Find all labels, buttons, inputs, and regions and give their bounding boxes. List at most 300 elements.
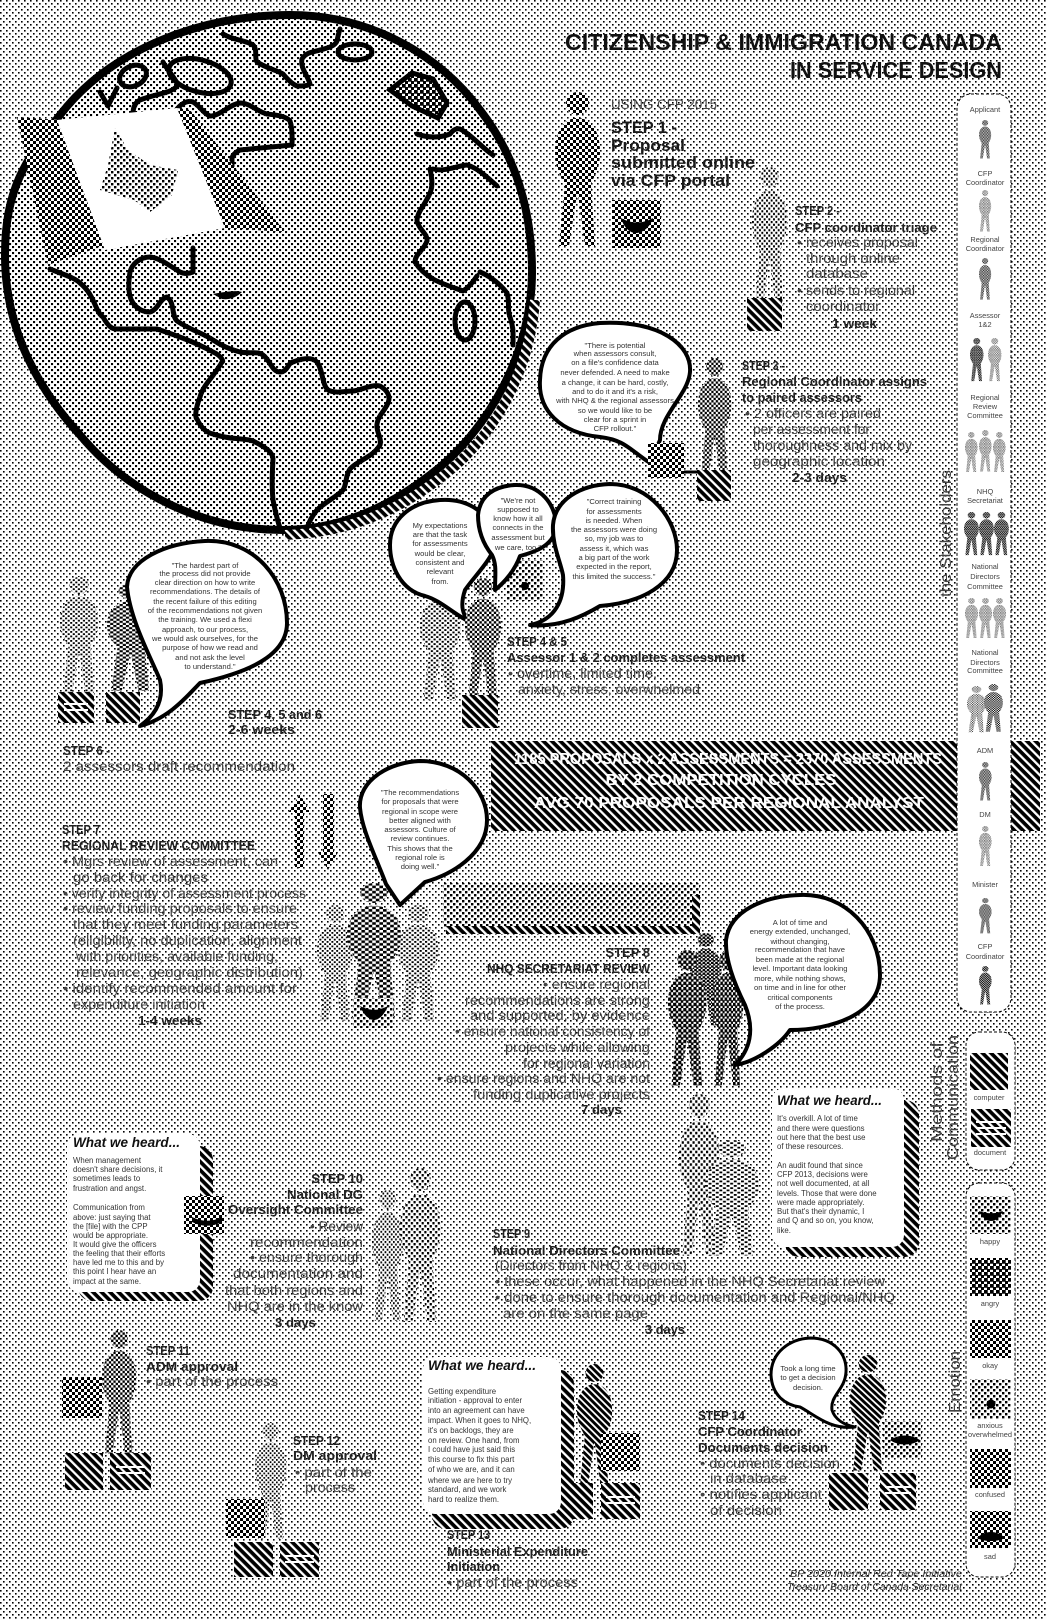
globe body	[5, 15, 532, 530]
speech bubble: training: a big part of the work	[579, 553, 650, 562]
panel: emotion legend: anxious	[977, 1421, 1003, 1430]
what we heard box: step 9: An audit found that since	[777, 1161, 863, 1170]
globe edge shadow	[285, 300, 535, 535]
speech bubble: step 6: the process did not provide	[159, 569, 251, 578]
panel: stakeholders legend: Review	[973, 402, 998, 411]
dark assessor figure	[107, 583, 154, 691]
document box	[58, 692, 94, 723]
speech bubble: supposed to: supposed to	[497, 505, 539, 514]
assessments banner: AVG 70 PROPOSALS PER REGIONAL ANALYST	[534, 795, 924, 812]
what we heard box: step 10	[67, 1134, 213, 1301]
step 7 text: (eligibility, no duplication, alignment	[73, 933, 302, 948]
speech bubble: step 3	[540, 323, 690, 463]
step 4 and 5 group	[390, 484, 746, 728]
speech bubble: expectations: are that the task	[413, 530, 467, 539]
speech bubble: step 8: of the process.	[775, 1002, 825, 1011]
icon: okay	[970, 1320, 1011, 1358]
footer credit: BP 2020 Internal Red Tape Initiative	[790, 1568, 962, 1580]
panel: emotion legend: confused	[975, 1490, 1005, 1499]
footer credit: Treasury Board of Canada Secretariat	[787, 1581, 963, 1593]
speech bubble: step 6: recommendations. The details of	[150, 587, 261, 596]
step 13 text: STEP 13	[447, 1527, 490, 1542]
step 8 text: funding duplicative projects	[473, 1087, 650, 1102]
speech bubble: supposed to: connects in the	[492, 523, 544, 532]
speech bubble: step 3: never defended. A need to make	[560, 368, 670, 377]
what we heard box: step 9: But that's their dynamic, I	[777, 1207, 864, 1216]
step 8 text: and supported, by evidence	[470, 1008, 650, 1023]
regional coordinator figure	[698, 358, 731, 478]
icon: confused	[970, 1449, 1011, 1488]
overwhelmed emotion box	[507, 560, 543, 601]
step 2	[747, 167, 937, 331]
step 6 group: left figures and bubble	[58, 541, 322, 774]
what we heard box: step 9: What we heard...	[777, 1092, 882, 1108]
icon: ADM	[979, 762, 992, 800]
speech bubble: expectations: relevant	[426, 567, 454, 576]
speech bubble: step 8: recommendation that have	[755, 945, 845, 954]
step 9 text: • done to ensure thorough documentation and Regional/NHQ	[495, 1290, 895, 1305]
step 1 text	[611, 97, 755, 190]
up arrow	[289, 794, 310, 868]
flag right band	[177, 108, 285, 232]
speech bubble: step 6: approach, to our process,	[162, 625, 248, 634]
step 8 text: recommendations are strong	[465, 993, 650, 1008]
step 11	[62, 1330, 278, 1490]
speech bubble: step 6	[127, 541, 287, 726]
panel: stakeholders legend: CFP	[978, 169, 992, 178]
speech bubble: training: "Correct training	[587, 497, 641, 506]
step 4, 5 and 6 duration: STEP 4, 5 and 6	[228, 707, 322, 722]
speech bubble: step 7: regional role is	[395, 853, 445, 862]
computer box	[829, 1473, 868, 1510]
step 3 text: 2-3 days	[792, 470, 847, 485]
speech bubble: training: for assessments	[586, 507, 642, 516]
speech bubble: expectations	[390, 500, 495, 622]
maple leaf	[100, 128, 178, 212]
computer box	[462, 695, 498, 728]
panel: methods of communication legend: document	[974, 1148, 1006, 1157]
step 13 text: • part of the process	[447, 1575, 578, 1590]
speech bubble: training: is needed. When	[586, 516, 642, 525]
speech bubble: step 7: doing well."	[401, 862, 440, 871]
speech bubble: training: the assessors were doing	[571, 525, 657, 534]
panel: stakeholders legend: ADM	[977, 746, 993, 755]
panel: stakeholders legend: Directors	[970, 572, 1000, 581]
what we heard box: step 10: would be appropriate.	[72, 1231, 148, 1240]
step 10 text: STEP 10	[311, 1171, 363, 1186]
step 8	[437, 895, 880, 1117]
panel: methods of communication legend: computer	[974, 1093, 1005, 1102]
Cuba	[213, 291, 242, 299]
computer box	[697, 470, 731, 501]
what we heard box: step 13: standard, and we work	[428, 1485, 507, 1494]
what we heard box: step 13: Getting expenditure	[428, 1387, 496, 1396]
document box	[110, 1453, 151, 1490]
speech bubble: step 8: energy extended, unchanged,	[750, 927, 850, 936]
step 10 text: NHQ are in the know	[227, 1299, 363, 1314]
speech bubble: step 6: we would ask ourselves, for the	[151, 634, 258, 643]
step 10 text: 3 days	[275, 1315, 316, 1330]
speech bubble: step 8: critical components	[768, 993, 833, 1002]
step 9 text: National Directors Committee	[493, 1243, 680, 1258]
speech bubble: expectations: My expectations	[413, 521, 468, 530]
icon: document	[971, 1109, 1011, 1147]
step 3 text: to paired assessors	[742, 390, 862, 405]
speech bubble: training: so, my job was to	[585, 534, 643, 543]
speech bubble: training: expected in the report,	[576, 562, 652, 571]
panel: emotion legend: happy	[980, 1237, 1000, 1246]
step 4 and 5 text	[507, 634, 746, 697]
document box	[880, 1473, 916, 1510]
step 13 text	[447, 1527, 588, 1590]
step 14 text: STEP 14	[698, 1408, 746, 1423]
happy emotion box	[184, 1196, 224, 1234]
step 2 text	[795, 203, 937, 331]
assessments banner: 1185 PROPOSALS x 2 ASSESSMENTS = 2370 ASSESSMENTS	[514, 751, 942, 768]
speech bubble: step 14: Took a long time	[780, 1364, 836, 1373]
emotion box	[226, 1499, 265, 1538]
panel: stakeholders legend: National	[971, 562, 999, 571]
what we heard box: step 9: and there were questions	[777, 1124, 865, 1133]
what we heard box: step 9: levels. Those that were done	[777, 1189, 877, 1198]
step 10 text	[225, 1171, 363, 1330]
icon: national DG oversight committee	[967, 684, 1003, 732]
step 8 text: NHQ SECRETARIAT REVIEW	[487, 961, 651, 976]
panel: stakeholders legend: Committee	[967, 666, 1003, 675]
step 7 text: • identify recommended amount for	[63, 981, 298, 996]
speech bubble: expectations: would be clear,	[414, 549, 465, 558]
speech bubble: step 14	[771, 1338, 855, 1427]
icon: CFP coordinator bottom	[979, 966, 992, 1004]
speech bubble: expectations: from.	[431, 577, 449, 586]
step 7 text: go back for changes	[73, 870, 208, 885]
speech bubble: step 6: the recent failure of this editing	[153, 597, 257, 606]
speech bubble: step 3: clear for a sprint in	[584, 415, 646, 424]
panel: stakeholders legend: Directors	[970, 658, 1000, 667]
step 8 text	[437, 945, 651, 1117]
step 11 text: STEP 11	[146, 1343, 190, 1358]
what we heard box: step 13: it's on backlogs, they are	[428, 1426, 514, 1435]
panel: stakeholders legend: DM	[979, 810, 991, 819]
panel: emotion legend: overwhelmed	[968, 1430, 1012, 1439]
step 7 text: • review funding proposals to ensure	[63, 901, 297, 916]
speech bubble: step 3: when assessors consult,	[573, 349, 656, 358]
step 2 text: STEP 2 -	[795, 203, 840, 218]
speech bubble: step 7: review continues.	[391, 834, 449, 843]
DM figure	[255, 1423, 286, 1538]
step 7 text: • Mgrs review of assessment, can	[63, 854, 278, 869]
computer box	[554, 1483, 593, 1519]
panel: stakeholders legend: 1&2	[978, 320, 992, 329]
speech bubble: step 8: level. Important data looking	[753, 964, 847, 973]
step 13 text: Initiation	[447, 1559, 500, 1574]
panel: emotion legend	[966, 1183, 1015, 1577]
icon: regional review committee	[965, 430, 1006, 472]
speech bubble: step 14: decision.	[793, 1383, 823, 1392]
what we heard box: step 13: I could have just said this	[428, 1445, 515, 1454]
step 10 text: Oversight Committee	[228, 1202, 363, 1217]
step 9	[493, 1088, 919, 1337]
what we heard box: step 10: When management	[73, 1156, 142, 1165]
ADM figure	[102, 1330, 136, 1453]
down arrow	[318, 794, 338, 870]
speech bubble: supposed to: we care, too."	[494, 543, 541, 552]
what we heard box: step 10: have led me to this and by	[73, 1258, 164, 1267]
what we heard box: step 13: on review. One hand, from	[428, 1436, 519, 1445]
speech bubble: step 7: "The recommendations	[381, 788, 459, 797]
assessments banner	[491, 741, 1040, 831]
step 14 text: of decision	[710, 1503, 782, 1518]
what we heard box: step 9: It's overkill. A lot of time	[777, 1114, 858, 1123]
land outlines	[50, 29, 513, 528]
document box	[280, 1542, 319, 1577]
icon: NHQ secretariat	[964, 512, 1009, 555]
computer box	[234, 1542, 273, 1577]
step 8 text: • ensure regional	[543, 977, 650, 992]
step 7 text: REGIONAL REVIEW COMMITTEE	[62, 838, 255, 853]
step 12 text: DM approval	[293, 1448, 377, 1463]
panel: stakeholders legend: Applicant	[970, 105, 1000, 114]
flag left band	[17, 117, 105, 265]
what we heard box: step 13: of who we are, and it can	[428, 1465, 515, 1474]
emotion box	[601, 1433, 640, 1471]
what we heard box: step 10: impact at the same.	[73, 1277, 141, 1286]
speech bubble: expectations: consistent and	[416, 558, 464, 567]
panel: stakeholders legend: Assessor	[970, 311, 1001, 320]
panel: stakeholders legend: NHQ	[977, 487, 993, 496]
speech bubble: step 8: on time and in line for other	[754, 983, 846, 992]
Greenland ice	[390, 73, 447, 118]
step 14	[698, 1338, 922, 1518]
panel: stakeholders legend: Coordinator	[966, 244, 1005, 253]
step 10 text: recommendation	[250, 1235, 363, 1250]
step 6 text	[63, 743, 295, 774]
step 11 text	[146, 1343, 278, 1389]
step 12 text: • part of the	[295, 1465, 372, 1480]
step 8 text: • ensure national consistency of	[455, 1024, 650, 1039]
what we heard box: step 13: initiation - approval to enter	[428, 1396, 522, 1405]
step 10 text: that both regions and	[225, 1283, 363, 1298]
panel: stakeholders legend: CFP	[978, 942, 992, 951]
document box	[601, 1483, 640, 1519]
step 3 text: per assessment for	[753, 422, 871, 437]
speech bubble: step 6: "The hardest part of	[172, 561, 239, 570]
panel: emotion legend: angry	[981, 1299, 1000, 1308]
what we heard box: step 10: above: just saying that	[73, 1213, 151, 1222]
icon: DM	[979, 826, 992, 866]
step 4 and 5 text: Assessor 1 & 2 completes assessment	[507, 650, 746, 665]
what we heard box: step 13: What we heard...	[428, 1357, 536, 1373]
step 3 text: STEP 3 -	[742, 358, 785, 373]
what we heard box: step 13: impact. When it goes to NHQ,	[428, 1416, 531, 1425]
speech bubble: step 8	[726, 895, 880, 1065]
speech bubble: step 7: assessors. Culture of	[384, 825, 457, 834]
footer credit	[787, 1568, 963, 1593]
step 2 text: 1 week	[832, 316, 878, 331]
title: CITIZENSHIP & IMMIGRATION CANADA	[565, 29, 1002, 55]
what we heard box: step 10: What we heard...	[73, 1134, 180, 1150]
step 13 text: Ministerial Expenditure	[447, 1544, 588, 1559]
emotion box	[62, 1377, 102, 1418]
flag white field	[57, 108, 225, 250]
dark assessor figure	[465, 578, 501, 701]
what we heard box: step 10: sometimes leads to	[73, 1174, 141, 1183]
speech bubble: step 3: so we would like to be	[578, 406, 652, 415]
step 4 and 5 text: STEP 4 & 5	[507, 634, 567, 649]
what we heard box: step 10: frustration and angst.	[73, 1184, 146, 1193]
speech bubble: step 6: clear direction on how to write	[155, 578, 255, 587]
speech bubble: step 6: and not ask the level	[175, 653, 245, 662]
icon: happy	[970, 1196, 1011, 1234]
step 14 text: in database	[710, 1471, 787, 1486]
computer box	[106, 692, 140, 723]
step 12	[226, 1423, 377, 1577]
what we heard box: step 9: of these resources.	[777, 1142, 843, 1151]
step 7 text: that they meet funding parameters	[73, 917, 298, 932]
speech bubble: training	[530, 484, 677, 625]
step 2 text: database	[806, 266, 868, 281]
step 10	[67, 1134, 440, 1330]
minister figure	[577, 1364, 612, 1484]
step 7	[62, 761, 487, 1028]
panel: stakeholders legend: Minister	[972, 880, 998, 889]
secretariat figures	[668, 933, 744, 1086]
what we heard box: step 10: Communication from	[73, 1203, 145, 1212]
panel: stakeholders legend: Coordinator	[966, 178, 1005, 187]
what we heard box: step 10: doesn't share decisions, it	[73, 1165, 163, 1174]
step 1 text: USING CFP 2015	[611, 97, 717, 112]
step 9 text: STEP 9	[493, 1226, 530, 1241]
step 8 text: 7 days	[581, 1102, 622, 1117]
side label: the Stakeholders: the Stakeholders	[938, 470, 955, 597]
speech bubble: supposed to: know how it all	[493, 514, 543, 523]
panel: emotion legend: okay	[982, 1361, 998, 1370]
step 3 text: geographic location	[753, 454, 885, 469]
step 7 text: relevance, geographic distribution)	[76, 965, 303, 980]
step 8 text: STEP 8	[605, 945, 650, 960]
icon: CFP coordinator	[979, 190, 991, 232]
step 4 and 5 text: • overtime, limited time,	[508, 666, 657, 681]
step 3 text: Regional Coordinator assigns	[742, 374, 927, 389]
light assessor figure	[420, 580, 460, 700]
panel: stakeholders legend: Committee	[967, 411, 1003, 420]
panel: stakeholders legend: Committee	[967, 582, 1003, 591]
speech bubble: step 6: of the recommendations not given	[148, 606, 262, 615]
side label: methods of communication: Communication	[945, 1035, 962, 1160]
step 12 text: STEP 12	[293, 1433, 340, 1448]
what we heard box: step 9: were made appropriately.	[776, 1198, 864, 1207]
step 14 text: • documents decision	[700, 1456, 840, 1471]
grey band	[443, 883, 700, 934]
step 6 text: 2 assessors draft recommendation	[63, 759, 295, 774]
speech bubble: supposed to	[478, 485, 556, 590]
what we heard box: step 9: out here that the best use	[777, 1133, 865, 1142]
speech bubble: training: this limited the success."	[573, 572, 656, 581]
what we heard box: step 13: into an agreement can have	[428, 1406, 525, 1415]
step 8 text: projects while allowing	[505, 1040, 650, 1055]
what we heard box: step 9	[772, 1088, 919, 1257]
step 2 text: CFP coordinator triage	[795, 220, 937, 235]
step 3	[540, 323, 927, 501]
title	[565, 29, 1002, 83]
speech bubble: step 6: purpose of how we read and	[162, 643, 258, 652]
icon: applicant	[979, 120, 991, 158]
panel: emotion legend: sad	[984, 1552, 996, 1561]
step 9 text: are on the same page	[503, 1306, 648, 1321]
step 9 text: (Directors from NHQ & regions)	[495, 1258, 687, 1273]
step 1 text: via CFP portal	[611, 171, 730, 190]
speech bubble: supposed to: assessment but	[491, 533, 545, 542]
speech bubble: expectations: for assessments	[412, 539, 468, 548]
speech bubble: step 8: A lot of time and	[773, 918, 827, 927]
directors figures	[679, 1094, 759, 1256]
what we heard box: step 13: hard to realize them.	[428, 1495, 499, 1504]
side label: methods of communication	[929, 1035, 962, 1160]
speech bubble: step 6: to understand."	[184, 662, 236, 671]
speech bubble: step 7	[360, 761, 487, 905]
what we heard box: step 10: the feeling that their efforts	[73, 1249, 165, 1258]
computer box	[65, 1453, 103, 1490]
panel: stakeholders legend	[957, 94, 1011, 1012]
step 11 text: • part of the process	[146, 1374, 278, 1389]
step 10 text: • Review	[310, 1219, 363, 1234]
step 4, 5 and 6 duration	[228, 707, 322, 737]
step 3 text: thoroughness and mix by	[753, 438, 912, 453]
step 14 text: Documents decision	[698, 1440, 828, 1455]
step 14 text	[698, 1408, 840, 1518]
what we heard box: step 9: and Q and so on, you know,	[777, 1216, 874, 1225]
icon: regional coordinator	[979, 258, 991, 300]
step 8 text: • ensure regions and NHQ are not	[437, 1071, 650, 1086]
speech bubble: step 8: been made at the regional	[756, 955, 844, 964]
speech bubble: supposed to: "We're not	[501, 496, 536, 505]
step 2 text: • sends to regional	[797, 283, 915, 298]
step 4 and 5 text: anxiety, stress, overwhelmed	[518, 682, 700, 697]
step 1	[555, 92, 755, 248]
step 3 text: • 2 officers are paired	[745, 406, 881, 421]
speech bubble: step 8: more, while nothing shows,	[754, 974, 846, 983]
what we heard box: step 9: like.	[777, 1226, 791, 1235]
step 12 text	[293, 1433, 377, 1495]
speech bubble: step 7: better aligned with	[389, 816, 451, 825]
what we heard box: step 10: the [file] with the CPP	[73, 1222, 148, 1231]
panel: stakeholders legend: Secretariat	[967, 496, 1003, 505]
light assessor figure	[60, 577, 98, 692]
panel: stakeholders legend: National	[971, 648, 999, 657]
happy emotion box	[353, 998, 393, 1028]
step 2 text: through online	[806, 251, 900, 266]
icon: overwhelmed	[970, 1379, 1011, 1419]
speech bubble: step 3: CFP rollout."	[594, 424, 637, 433]
panel: stakeholders legend: Regional	[970, 235, 1000, 244]
coordinator figure	[752, 167, 787, 306]
step 9 text: 3 days	[645, 1322, 685, 1337]
step 10 text: • ensure thorough	[250, 1250, 363, 1265]
speech bubble: step 3: with NHQ & the regional assessors	[555, 396, 674, 405]
speech bubble: step 3: a change, it can be hard, costly,	[562, 378, 668, 387]
emotion box	[648, 443, 684, 478]
step 4, 5 and 6 duration: 2-6 weeks	[228, 722, 295, 737]
step 2 text: • receives proposal	[797, 235, 918, 250]
speech bubble: training: assess it, which was	[580, 544, 649, 553]
speech bubble: step 8: without changing,	[769, 937, 830, 946]
globe with map of the Americas	[5, 15, 535, 535]
icon: sad	[970, 1511, 1011, 1548]
what we heard box: step 9: CFP 2013, decisions were	[777, 1170, 868, 1179]
what we heard box: step 9: not well documented, at all	[777, 1179, 870, 1188]
speech bubble: step 3: "There is potential	[585, 341, 646, 350]
side label: emotion: Emotion	[947, 1351, 964, 1413]
